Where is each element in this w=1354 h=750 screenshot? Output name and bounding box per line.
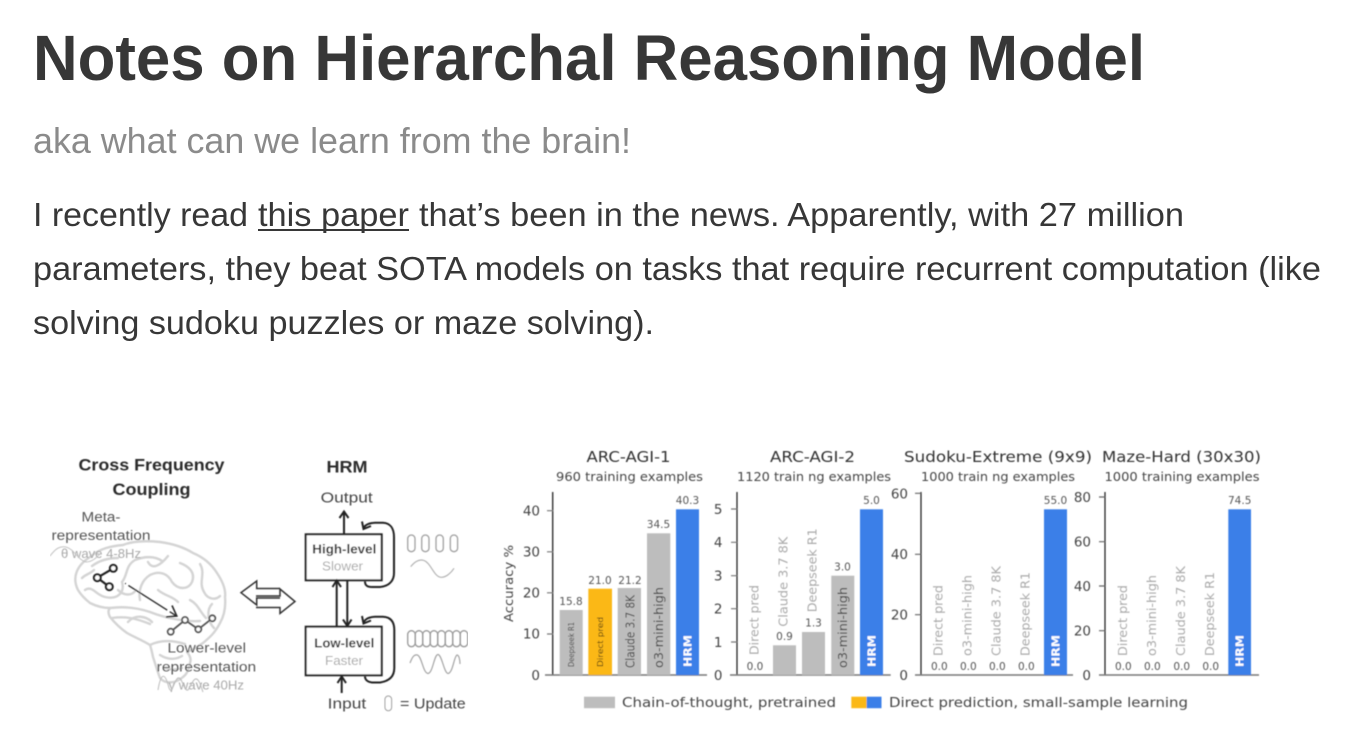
y axis: 0 bbox=[1082, 668, 1091, 684]
bars bbox=[773, 509, 883, 675]
heading: cross frequency coupling bbox=[78, 456, 225, 499]
bar labels bbox=[931, 495, 1067, 673]
intro paragraph: this paper bbox=[258, 196, 409, 233]
intro paragraph bbox=[33, 196, 1321, 341]
y axis: 20 bbox=[523, 586, 540, 602]
bar labels: HRM bbox=[1050, 635, 1062, 667]
y axis bbox=[891, 486, 1073, 684]
y axis: 20 bbox=[891, 608, 908, 624]
bar labels bbox=[559, 495, 699, 668]
icon: slow update capsules bbox=[408, 535, 458, 552]
box: high-level module bbox=[306, 534, 382, 580]
bar labels: 0.0 bbox=[1018, 661, 1035, 673]
label: input: Input bbox=[328, 695, 367, 712]
bar labels: Claude 3.7 8K bbox=[776, 535, 790, 627]
bar labels: Direct pred bbox=[1116, 585, 1130, 656]
bar labels: o3-mini-high bbox=[960, 575, 974, 656]
label: meta-representation: Meta- bbox=[82, 510, 120, 524]
intro paragraph: I recently read bbox=[33, 196, 248, 233]
chart subtitle: 1000 training examples: 1000 train ng examples bbox=[921, 470, 1075, 484]
icon: fast update capsules bbox=[408, 631, 468, 647]
bar labels: Claude 3.7 8K bbox=[624, 594, 638, 668]
bar labels: Deepseek R1 bbox=[567, 622, 576, 667]
chart subtitle: 1000 training examples: 1000 training examples bbox=[1104, 470, 1260, 484]
box: high-level module: High-level bbox=[312, 541, 376, 556]
y axis: 60 bbox=[1074, 534, 1091, 550]
box: low-level module bbox=[306, 627, 382, 675]
title: Notes on Hierarchal Reasoning Model bbox=[33, 22, 1145, 94]
arrow: output bbox=[340, 512, 348, 534]
arrow: low-level recurrent loop bbox=[362, 616, 394, 682]
y axis: 4 bbox=[714, 535, 722, 551]
panel: cross frequency coupling bbox=[50, 456, 256, 692]
arrow: high to low bbox=[343, 580, 352, 626]
box: high-level module: Slower bbox=[322, 559, 364, 574]
bar labels: 40.3 bbox=[676, 495, 699, 507]
heading: HRM: HRM bbox=[326, 458, 368, 477]
heading: cross frequency coupling: Cross Frequency bbox=[78, 456, 225, 474]
arrow: low to high bbox=[332, 580, 341, 627]
label: gamma wave: γ wave 40Hz bbox=[168, 678, 244, 692]
chart subtitle: 960 training examples: 960 training examples bbox=[556, 470, 703, 484]
icon: slow wave bbox=[411, 560, 454, 577]
figure: brain and HRM diagram bbox=[50, 456, 468, 712]
bar labels: Deepseek R1 bbox=[806, 528, 820, 612]
intro paragraph: parameters, they beat SOTA models on tasks that require recurrent computation (like bbox=[33, 250, 1321, 287]
bar labels: o3-mini-high bbox=[836, 587, 850, 668]
label: output: Output bbox=[321, 490, 374, 507]
icon: meta representation network bbox=[94, 565, 117, 590]
icon: gamma wave bbox=[158, 676, 203, 692]
chart: ARC-AGI-1 bbox=[501, 448, 707, 684]
y axis: 0 bbox=[714, 668, 722, 684]
y axis: 5 bbox=[714, 502, 722, 518]
bar labels: Claude 3.7 8K bbox=[1174, 565, 1188, 656]
y axis: 0 bbox=[531, 668, 540, 684]
chart title: ARC-AGI-1: ARC-AGI-1 bbox=[586, 448, 670, 466]
bar labels: 0.0 bbox=[931, 661, 948, 673]
y axis bbox=[501, 492, 707, 684]
figure: accuracy charts bbox=[501, 448, 1261, 711]
label: lower-level representation bbox=[157, 641, 256, 675]
icon: update capsule legend bbox=[385, 696, 392, 711]
heading: cross frequency coupling: Coupling bbox=[112, 481, 190, 499]
y axis: 80 bbox=[1074, 490, 1091, 506]
icon: theta wave bbox=[50, 547, 100, 562]
label: lower-level representation: Lower-level bbox=[168, 641, 246, 656]
panel: HRM diagram bbox=[306, 458, 468, 712]
label: meta-representation: representation bbox=[52, 528, 150, 543]
bar labels: 0.0 bbox=[747, 661, 763, 673]
bar labels: 5.0 bbox=[863, 495, 880, 507]
bar labels: 0.9 bbox=[776, 631, 793, 643]
bar labels: 0.0 bbox=[1144, 661, 1161, 673]
y axis: 1 bbox=[714, 635, 722, 651]
chart: Maze-Hard bbox=[1074, 448, 1261, 684]
bars bbox=[1228, 509, 1251, 675]
label: theta wave: θ wave 4-8Hz bbox=[61, 547, 141, 561]
bars bbox=[1044, 509, 1067, 675]
y axis bbox=[1074, 490, 1259, 684]
y axis: 10 bbox=[523, 627, 540, 643]
arrow: meta to lower level bbox=[125, 583, 177, 617]
chart title: Maze-Hard: Maze-Hard (30x30) bbox=[1102, 448, 1261, 466]
bar labels: 74.5 bbox=[1228, 495, 1251, 507]
bars bbox=[560, 509, 699, 675]
bar labels: HRM bbox=[866, 635, 878, 667]
box: low-level module: Low-level bbox=[314, 635, 374, 650]
label: update: = Update bbox=[400, 695, 466, 712]
legend: Direct prediction, small-sample learning bbox=[889, 696, 1188, 711]
bar labels: o3-mini-high bbox=[1145, 575, 1159, 656]
bar labels: 0.0 bbox=[989, 661, 1006, 673]
label: lower-level representation: representation bbox=[157, 660, 256, 675]
bar labels: Direct pred bbox=[596, 617, 605, 667]
bar labels bbox=[1115, 495, 1251, 673]
y axis: 20 bbox=[1074, 624, 1091, 640]
bar labels: 3.0 bbox=[834, 562, 851, 574]
bar labels: 0.0 bbox=[960, 661, 977, 673]
bar labels: 55.0 bbox=[1044, 495, 1067, 507]
bar labels: 21.2 bbox=[618, 575, 642, 587]
y axis: Accuracy % bbox=[501, 545, 516, 622]
y axis: 40 bbox=[523, 504, 540, 520]
y axis: 40 bbox=[891, 547, 908, 563]
bar labels: 15.8 bbox=[559, 596, 583, 608]
legend: Chain-of-thought, pretrained bbox=[622, 696, 836, 711]
intro paragraph: that’s been in the news. Apparently, with 27 million bbox=[419, 196, 1184, 233]
chart: ARC-AGI-2 bbox=[714, 448, 891, 684]
y axis bbox=[714, 492, 891, 684]
arrow: high-level recurrent loop bbox=[362, 522, 394, 587]
bar labels: Deepseek R1 bbox=[1018, 572, 1032, 656]
bar labels: 21.0 bbox=[588, 575, 612, 587]
subtitle: aka what can we learn from the brain! bbox=[33, 120, 631, 161]
bar labels: 0.0 bbox=[1202, 661, 1219, 673]
bar labels bbox=[747, 495, 880, 673]
y axis: 40 bbox=[1074, 579, 1091, 595]
icon: fast wave bbox=[410, 654, 460, 674]
bar labels: Direct pred bbox=[748, 585, 762, 655]
bar labels: HRM bbox=[682, 635, 694, 667]
chart subtitle: 1120 training examples: 1120 train ng examples bbox=[737, 470, 891, 484]
y axis: 3 bbox=[714, 568, 722, 584]
icon: brain outline bbox=[75, 541, 225, 682]
chart title: Sudoku-Extreme: Sudoku-Extreme (9x9) bbox=[904, 448, 1092, 466]
bar labels: 0.0 bbox=[1173, 661, 1190, 673]
arrow: input bbox=[338, 676, 346, 693]
y axis: 30 bbox=[523, 544, 540, 560]
bar labels: Claude 3.7 8K bbox=[990, 565, 1004, 656]
y axis: 0 bbox=[899, 668, 908, 684]
chart: Sudoku-Extreme bbox=[891, 448, 1092, 684]
bar labels: 1.3 bbox=[805, 618, 822, 630]
y axis: 60 bbox=[891, 486, 908, 502]
intro paragraph: solving sudoku puzzles or maze solving). bbox=[33, 304, 654, 341]
bar labels: o3-mini-high bbox=[652, 587, 666, 668]
bar labels: HRM bbox=[1234, 635, 1247, 667]
bar labels: Deepseek R1 bbox=[1203, 572, 1217, 656]
bar labels: Direct pred bbox=[932, 585, 946, 656]
arrow: double arrow between diagrams bbox=[241, 581, 295, 614]
bar labels: 0.0 bbox=[1115, 661, 1132, 673]
label: meta-representation bbox=[52, 510, 150, 543]
icon: lower level network bbox=[168, 615, 215, 635]
chart title: ARC-AGI-2: ARC-AGI-2 bbox=[770, 448, 855, 466]
y axis: 2 bbox=[714, 602, 722, 618]
bar labels: 34.5 bbox=[647, 519, 670, 531]
legend bbox=[584, 696, 1188, 711]
box: low-level module: Faster bbox=[325, 653, 364, 668]
